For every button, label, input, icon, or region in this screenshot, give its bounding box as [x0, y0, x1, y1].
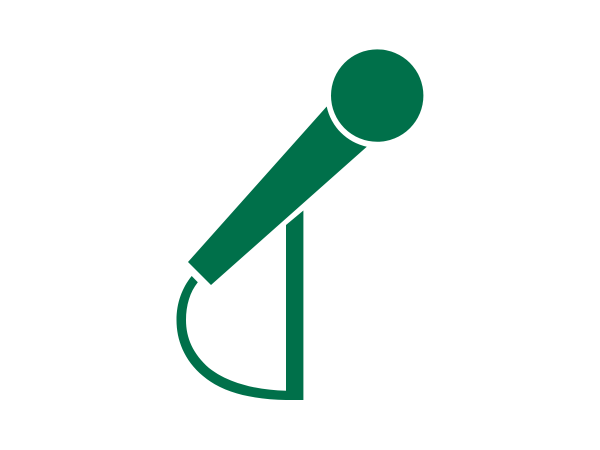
- microphone handle: [188, 106, 367, 285]
- stand and cable: [176, 210, 303, 400]
- microphone head: [331, 49, 423, 142]
